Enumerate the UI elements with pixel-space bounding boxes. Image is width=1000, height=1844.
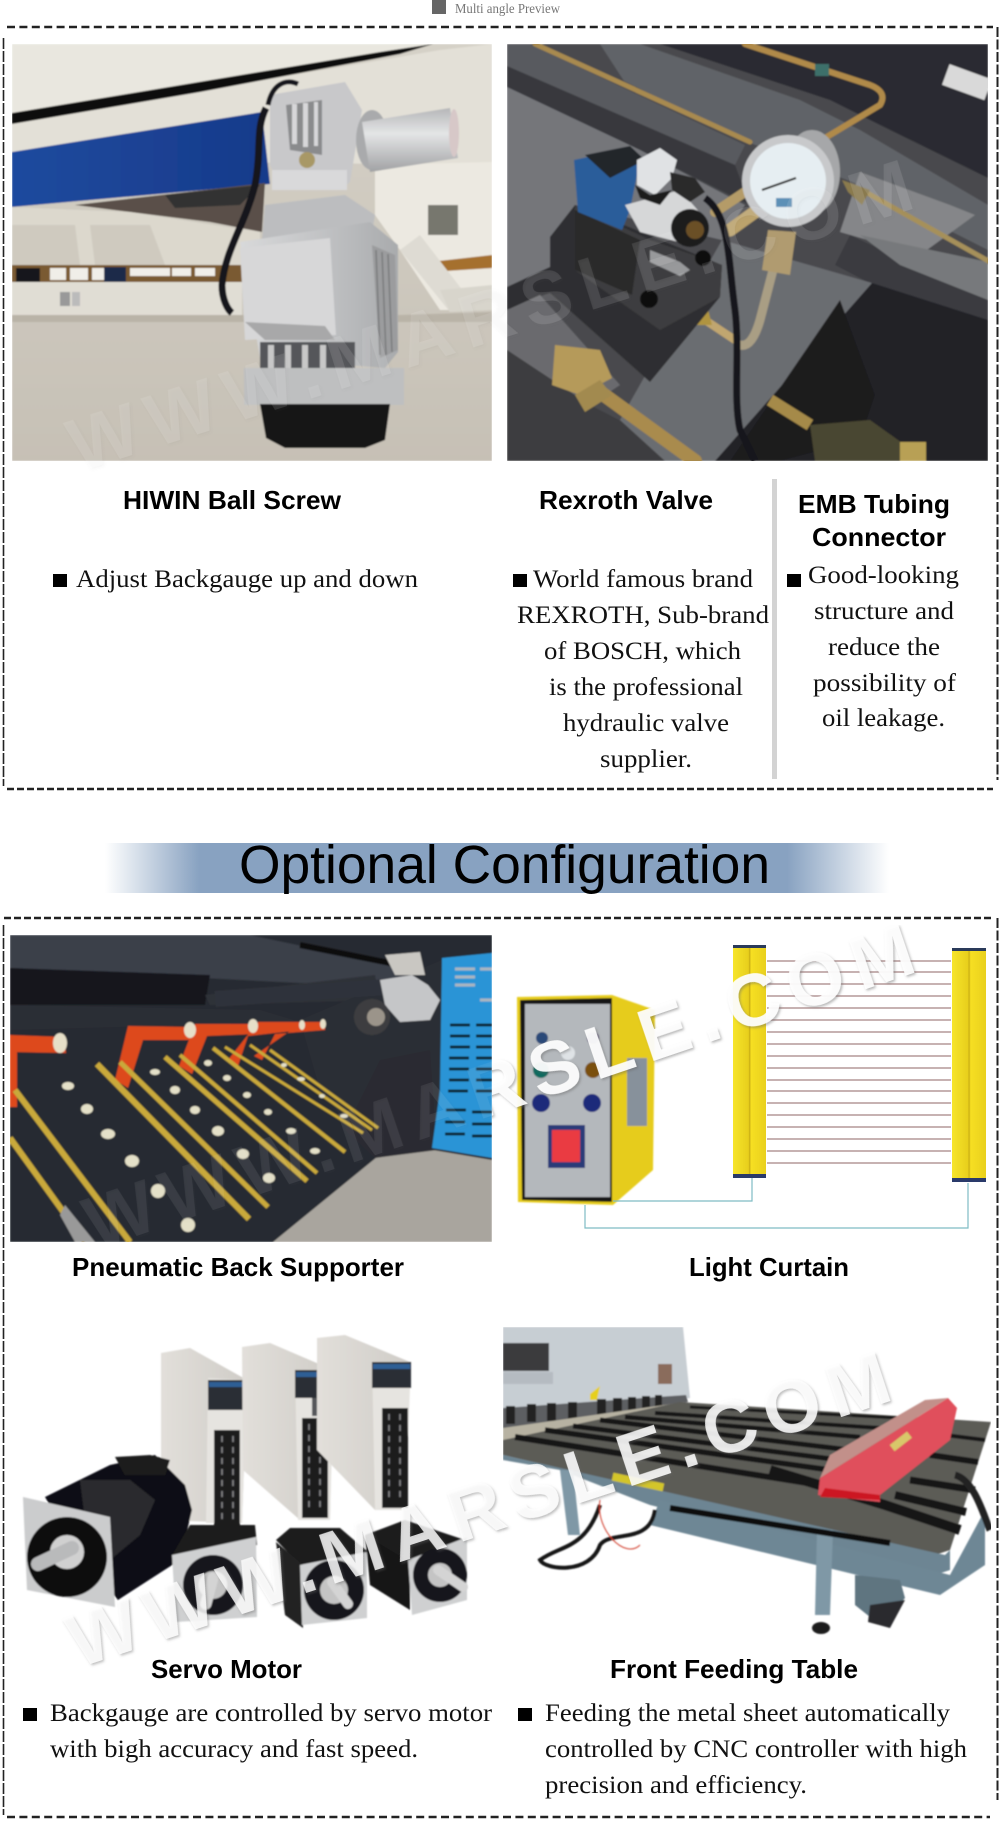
concrete floor [273,1150,492,1242]
wrapped red item [818,1398,957,1502]
text: Rexroth description: REXROTH, Sub-brand [517,600,769,629]
photo: pneumatic back supporter [10,935,492,1242]
drive 1 [161,1348,247,1525]
text: EMB description [787,560,959,732]
heading: Servo Motor: Servo Motor [151,1654,302,1684]
text: feeding table description [518,1698,967,1799]
text: HIWIN description: Adjust Backgauge up and down [76,564,418,593]
heading: Pneumatic Back Supporter: Pneumatic Back Supporter [72,1252,404,1282]
photo: front feeding table [503,1327,991,1634]
upper dark casing [660,44,988,178]
flex hose bottom right [770,400,926,461]
title banner: Optional Configuration: Optional Configuration [239,836,770,895]
text: EMB description: oil leakage. [822,703,945,732]
text: EMB description: possibility of [813,668,957,697]
photo: Rexroth valve and gauge [507,44,992,461]
blue panel [432,953,492,1158]
receiver bar [952,948,986,1182]
watermark: servo motors: WWW.MARSLE.COM [57,1336,900,1683]
blue solenoid valve [574,146,709,276]
small motor 1 [172,1525,257,1622]
text: feeding table description: Feeding the metal sheet automatically [545,1698,950,1727]
orange support arms [10,1022,325,1107]
photo: servo motors and drives [23,1335,467,1628]
perforation holes [62,1060,348,1232]
heading: EMB Tubing Connector: Connector [812,522,946,552]
text: feeding table description: precision and efficiency. [545,1770,807,1799]
text: Rexroth description: World famous brand [533,564,753,593]
heading: EMB Tubing Connector: EMB Tubing [798,489,950,519]
emitter bar [733,945,766,1178]
divider bar [772,479,777,779]
connecting wires [585,1178,968,1228]
drive 2 [242,1343,334,1520]
dashed frame: optional configuration panel [4,918,998,1817]
beams [767,961,951,1163]
gearbox [270,82,362,190]
motor body [240,195,404,448]
heading: HIWIN Ball Screw: HIWIN Ball Screw [123,485,342,515]
table top [503,1402,991,1555]
title banner: Optional Configuration [105,836,889,895]
pressure gauge [742,130,840,227]
text: Rexroth description: of BOSCH, which [544,636,741,665]
text: feeding table description: controlled by CNC controller with high [545,1734,967,1763]
text: Rexroth description: supplier. [600,744,692,773]
textured left deck [507,87,745,287]
large motor [23,1455,192,1607]
bottom left [507,267,550,310]
cylinder arm and bracket [215,945,440,1035]
encoder cylinder [356,108,459,172]
text: servo description: with bigh accuracy and fast speed. [50,1734,418,1763]
small motor 2 [276,1528,368,1628]
control box [517,995,655,1205]
watermark: upper panel: WWW.MARSLE.COM [58,143,922,487]
heading: EMB Tubing Connector [798,489,950,552]
text: servo description [23,1698,493,1763]
drive 3 [317,1335,411,1510]
textured plate [620,240,872,461]
brass pipes [535,44,990,461]
text: servo description: Backgauge are controlled by servo motor [50,1698,493,1727]
cable [222,108,266,313]
header: Multi angle Preview: Multi angle Preview [455,1,560,16]
manifold block [550,205,722,382]
heading: Light Curtain: Light Curtain [689,1252,849,1282]
watermark: feeding table: WWW.MARSLE.COM [57,1336,900,1683]
text: Rexroth description [513,564,769,773]
dashed frame: top panel [4,27,998,789]
text: EMB description: Good-looking [808,560,959,589]
black cable [705,198,755,461]
gold rails [10,1045,378,1242]
text: Rexroth description: is the professional [549,672,743,701]
text: Rexroth description: hydraulic valve [563,708,729,737]
drag chain [670,1508,890,1543]
hoses [540,1505,655,1568]
text: EMB description: reduce the [828,632,940,661]
small motor 3 [365,1520,467,1615]
watermark: light curtain: WWW.MARSLE.COM [74,908,924,1265]
watermark: pneumatic photo: WWW.MARSLE.COM [74,908,924,1265]
photo: HIWIN ball screw motor [12,44,492,461]
table frame and legs [503,1455,985,1634]
illustration: light curtain [517,945,986,1228]
heading: Rexroth Valve: Rexroth Valve [539,485,713,515]
heading: Front Feeding Table: Front Feeding Table [610,1654,858,1684]
machine body [503,1327,690,1445]
text: EMB description: structure and [814,596,954,625]
